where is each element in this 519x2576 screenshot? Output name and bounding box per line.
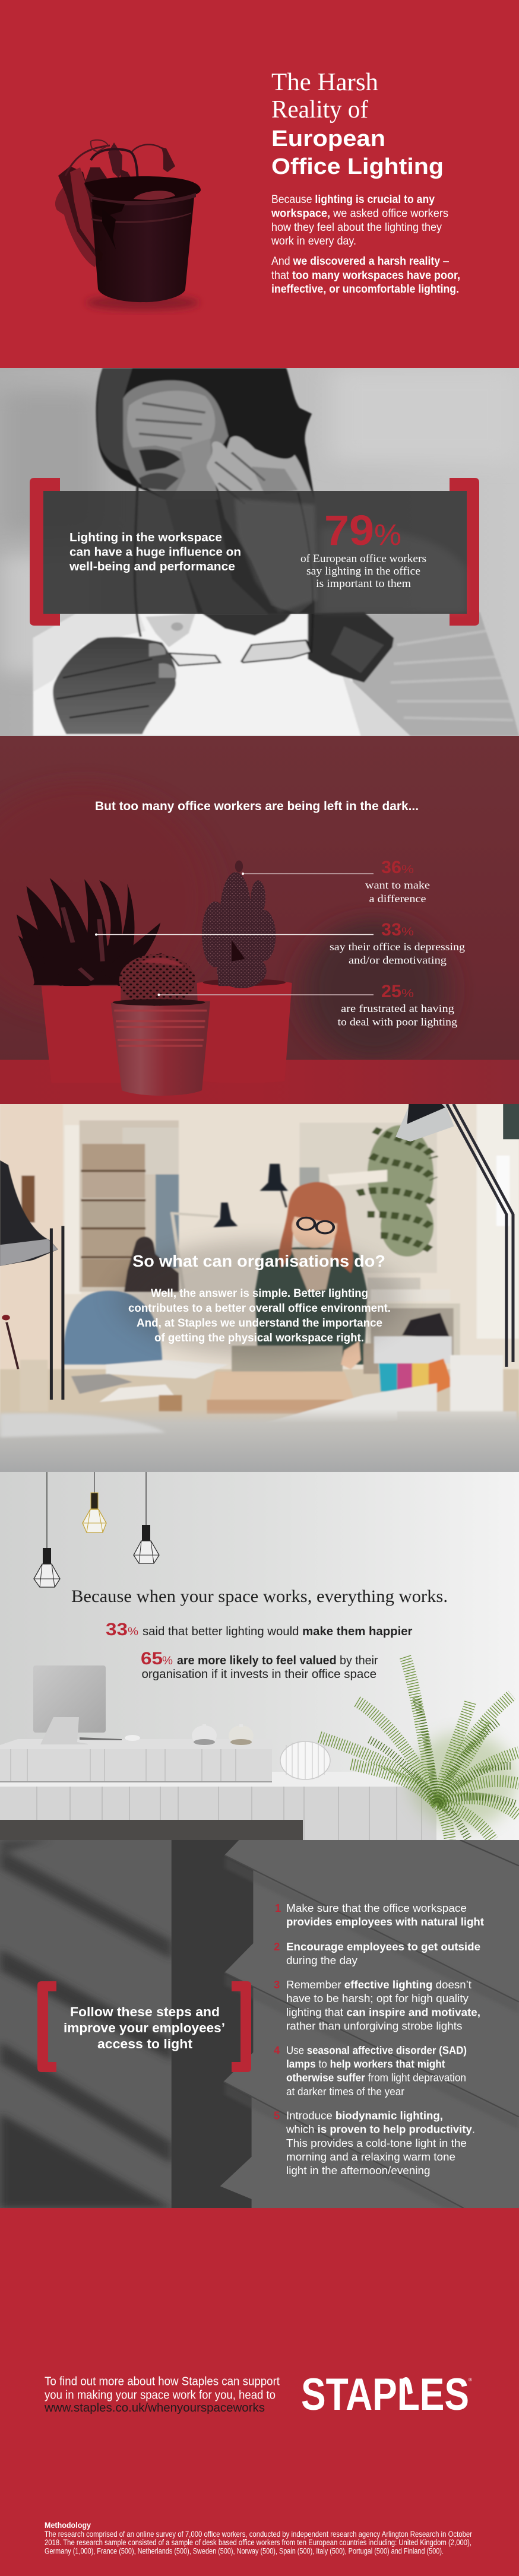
stat: 36% xyxy=(242,858,430,905)
logo: Staples: STAPLES xyxy=(301,2369,469,2420)
call to action: you in making your space work for you, head to xyxy=(45,2388,276,2401)
step 5: morning and a relaxing warm tone xyxy=(286,2150,455,2163)
step 3: lighting that can inspire and motivate, xyxy=(286,2006,480,2018)
image: man rubbing his eye holding glasses xyxy=(0,368,519,736)
desk lower counter xyxy=(0,1772,436,1840)
tall cactus xyxy=(235,861,243,872)
step 3: rather than unforgiving strobe lights xyxy=(286,2019,462,2032)
stat: 25%: to deal with poor lighting xyxy=(337,1016,457,1028)
stat: 33%: and/or demotivating xyxy=(349,954,447,966)
pendant lamp: gold xyxy=(83,1472,106,1533)
answer text block: of getting the physical workspace right. xyxy=(154,1331,364,1344)
shirt xyxy=(33,614,368,736)
step 4 xyxy=(274,2044,467,2098)
monitor xyxy=(33,1665,106,1744)
right pot xyxy=(197,982,292,1060)
title: Reality of xyxy=(271,96,368,123)
callout: follow these steps xyxy=(64,2004,225,2051)
wire vase xyxy=(280,1741,330,1779)
bracket: left xyxy=(37,1981,56,2072)
callout: influence statement: can have a huge influence on xyxy=(69,546,241,559)
intro text block: how they feel about the lighting they xyxy=(271,221,442,234)
wood box xyxy=(207,1372,354,1414)
panel: footer xyxy=(0,2208,519,2576)
image: bright room with pendant lamps, desk and plant xyxy=(0,1472,519,1840)
intro text block: that too many workspaces have poor, xyxy=(271,269,460,282)
step 5: which is proven to help productivity. xyxy=(286,2123,475,2136)
stat: 79%: % xyxy=(374,518,401,551)
stat: 33%: 33 xyxy=(381,920,401,940)
intro text block: Because lighting is crucial to any xyxy=(271,193,435,206)
panel: left in the dark xyxy=(0,736,519,1104)
call to action xyxy=(44,2375,280,2415)
laptop xyxy=(232,1346,343,1372)
step 2: Encourage employees to get outside xyxy=(286,1940,480,1953)
answer text block: And, at Staples we understand the importance xyxy=(137,1316,382,1330)
callout: influence statement xyxy=(69,531,241,573)
step 2: during the day xyxy=(286,1954,358,1966)
glasses xyxy=(169,653,220,665)
person in background xyxy=(124,1236,179,1292)
stat: 33%: say their office is depressing xyxy=(330,941,465,953)
stat: 65% valued: organisation if it invests in their office space xyxy=(141,1668,376,1681)
sleeve and arm xyxy=(331,612,519,736)
logo: Staples: ® xyxy=(469,2377,472,2383)
step 2: 2 xyxy=(274,1940,280,1953)
round cactus xyxy=(119,954,195,1006)
step 1: 1 xyxy=(275,1902,281,1914)
stat: 65% valued: % xyxy=(162,1655,173,1667)
stat: 79%: say lighting in the office xyxy=(306,566,420,578)
stat: 79%: 79 xyxy=(324,507,374,554)
panel: what can organisations do xyxy=(0,1104,519,1472)
step 1 xyxy=(275,1902,484,1928)
stat: 33% happier: said that better lighting would make them happier xyxy=(143,1625,413,1638)
stat: 36%: a difference xyxy=(369,893,426,905)
stat: 33% happier xyxy=(106,1620,413,1639)
neck and forearm xyxy=(202,614,292,636)
panel: follow these steps xyxy=(0,1840,519,2208)
answer text block xyxy=(128,1287,391,1344)
step 5: 5 xyxy=(274,2109,280,2121)
step 3: 3 xyxy=(274,1978,280,1991)
plant behind xyxy=(368,1125,433,1224)
stat: 79%: of European office workers xyxy=(300,553,426,565)
title: The Harsh xyxy=(271,69,378,96)
panel: lighting influence xyxy=(0,368,519,736)
bracket: right xyxy=(232,1981,251,2072)
collar xyxy=(145,614,195,648)
dark overlay panel xyxy=(43,491,467,614)
image: wilted plant in dark pot xyxy=(55,140,201,310)
methodology: Methodology xyxy=(45,2521,91,2530)
step 4: at darker times of the year xyxy=(286,2085,404,2098)
step 3: Remember effective lighting doesn’t xyxy=(286,1978,471,1991)
step 5 xyxy=(274,2109,475,2177)
step 3: have to be harsh; opt for high quality xyxy=(286,1992,469,2004)
stat: 65% valued: are more likely to feel valued by their xyxy=(177,1654,378,1667)
stat: 33% happier: 33 xyxy=(106,1620,128,1639)
fist xyxy=(53,637,176,734)
chair xyxy=(63,1290,162,1365)
stat: 79%: is important to them xyxy=(316,578,412,590)
image: dark window blinds xyxy=(0,1840,519,2208)
hair xyxy=(96,368,315,617)
stat: 25%: 25 xyxy=(381,982,401,1001)
pendant lamp: black right xyxy=(134,1472,159,1563)
stat: 25%: % xyxy=(401,988,414,1000)
title: Office Lighting xyxy=(271,154,444,179)
stat: 65% valued: 65 xyxy=(141,1649,163,1668)
heading: But too many office workers are being left in the dark... xyxy=(95,800,419,813)
lamp arms and shades xyxy=(447,1104,513,1367)
stat: 25% xyxy=(158,982,457,1028)
hand and cup xyxy=(341,1341,361,1369)
stat: 36%: 36 xyxy=(381,858,401,877)
answer text block: Well, the answer is simple. Better lighting xyxy=(151,1287,368,1300)
bracket: right xyxy=(450,478,479,626)
stat: 25%: are frustrated at having xyxy=(341,1003,454,1014)
call to action: To find out more about how Staples can support xyxy=(45,2375,280,2388)
step 5: Introduce biodynamic lighting, xyxy=(286,2109,443,2121)
stat: 36%: want to make xyxy=(365,879,430,891)
heading: Because when your space works, everything works. xyxy=(71,1587,448,1606)
stat: 65% valued xyxy=(141,1649,378,1681)
desk surface xyxy=(0,1369,519,1423)
methodology xyxy=(45,2521,472,2556)
stat: 79% xyxy=(300,507,426,590)
stat: 33% happier: % xyxy=(128,1626,138,1638)
image: potted cacti xyxy=(0,736,519,1104)
intro text block: workspace, we asked office workers xyxy=(271,207,448,220)
step 2 xyxy=(274,1940,480,1966)
woman xyxy=(255,1247,368,1365)
background lamps xyxy=(260,1164,288,1191)
step 1: provides employees with natural light xyxy=(286,1915,484,1928)
panel: intro xyxy=(55,72,460,313)
step 4: 4 xyxy=(274,2044,280,2056)
face xyxy=(123,380,271,617)
callout: follow these steps: improve your employees’ xyxy=(64,2020,225,2035)
tin pot xyxy=(111,1001,210,1096)
callout: follow these steps: Follow these steps and xyxy=(70,2004,220,2019)
callout: follow these steps: access to light xyxy=(97,2036,193,2051)
papers xyxy=(106,1360,229,1379)
callout: influence statement: well-being and performance xyxy=(69,560,235,573)
ornaments xyxy=(192,1724,254,1746)
step 3 xyxy=(274,1978,480,2032)
stat: 36%: % xyxy=(401,864,414,876)
intro text block xyxy=(271,193,460,296)
hand xyxy=(207,436,318,614)
fern xyxy=(318,1656,519,1840)
shelf right xyxy=(368,1303,460,1357)
pendant lamp: black left xyxy=(34,1472,60,1587)
step 1: Make sure that the office workspace xyxy=(286,1902,467,1914)
intro text block: And we discovered a harsh reality – xyxy=(271,255,449,268)
title: European xyxy=(271,126,385,151)
step 5: light in the afternoon/evening xyxy=(286,2164,430,2177)
stat: 33% xyxy=(95,920,465,966)
step 4: lamps to help workers that might xyxy=(286,2057,445,2070)
left pot xyxy=(42,986,121,1060)
panel: when your space works xyxy=(0,1472,519,1840)
intro text block: ineffective, or uncomfortable lighting. xyxy=(271,283,459,296)
step 4: otherwise suffer from light depravation xyxy=(286,2071,466,2083)
desk upper cabinet xyxy=(0,1739,273,1782)
step 4: Use seasonal affective disorder (SAD) xyxy=(286,2044,467,2056)
heading: So what can organisations do? xyxy=(132,1252,385,1270)
callout: influence statement: Lighting in the workspace xyxy=(69,531,222,544)
stat: 33%: % xyxy=(401,926,414,938)
white box and colourful folders xyxy=(374,1336,452,1363)
image: woman at a bright office desk xyxy=(0,1104,519,1472)
keyboard and mouse xyxy=(80,1735,140,1741)
call to action: www.staples.co.uk/whenyourspaceworks xyxy=(44,2401,265,2415)
step 5: This provides a cold-tone light in the xyxy=(286,2137,467,2149)
title xyxy=(271,69,444,179)
answer text block: contributes to a better overall office environment. xyxy=(128,1302,391,1315)
aloe xyxy=(17,878,162,987)
bottom foreground xyxy=(255,1384,437,1437)
intro text block: work in every day. xyxy=(271,234,356,248)
bracket: left xyxy=(30,478,60,626)
